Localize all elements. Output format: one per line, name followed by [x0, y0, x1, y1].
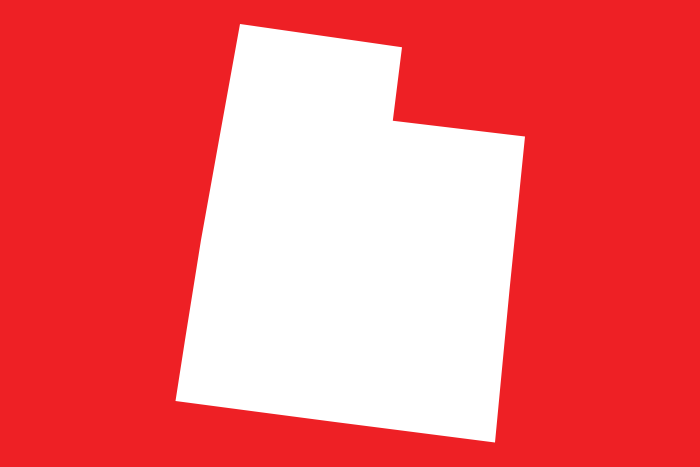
- icon: Utah state shape: [176, 24, 525, 442]
